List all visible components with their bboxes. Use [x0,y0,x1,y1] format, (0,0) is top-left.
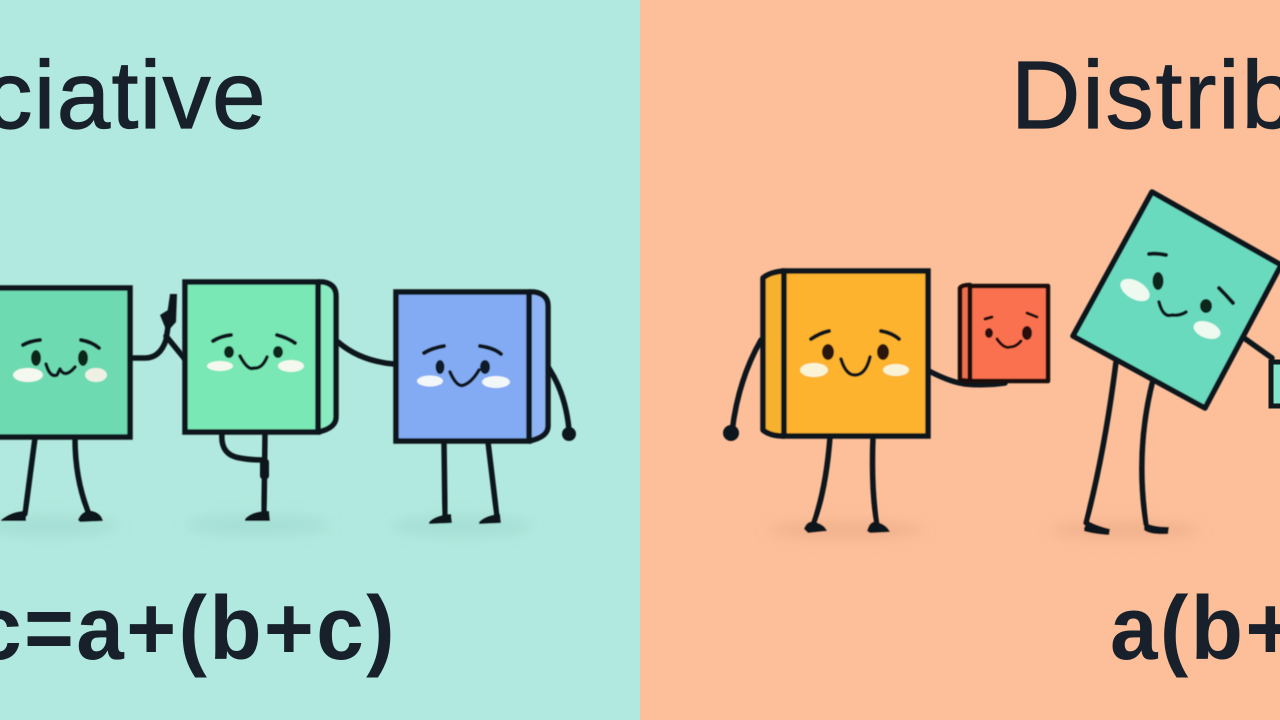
panel: associative background [0,0,640,720]
character: green book, middle [185,282,394,535]
character: tilted teal book [1050,192,1280,540]
character: green book, left [0,288,184,536]
character: small red book [960,285,1048,381]
character: blue book [392,292,576,536]
panel: distributive background [640,0,1280,720]
character: small teal book, right edge [1271,362,1280,406]
character: yellow book [723,271,1005,540]
